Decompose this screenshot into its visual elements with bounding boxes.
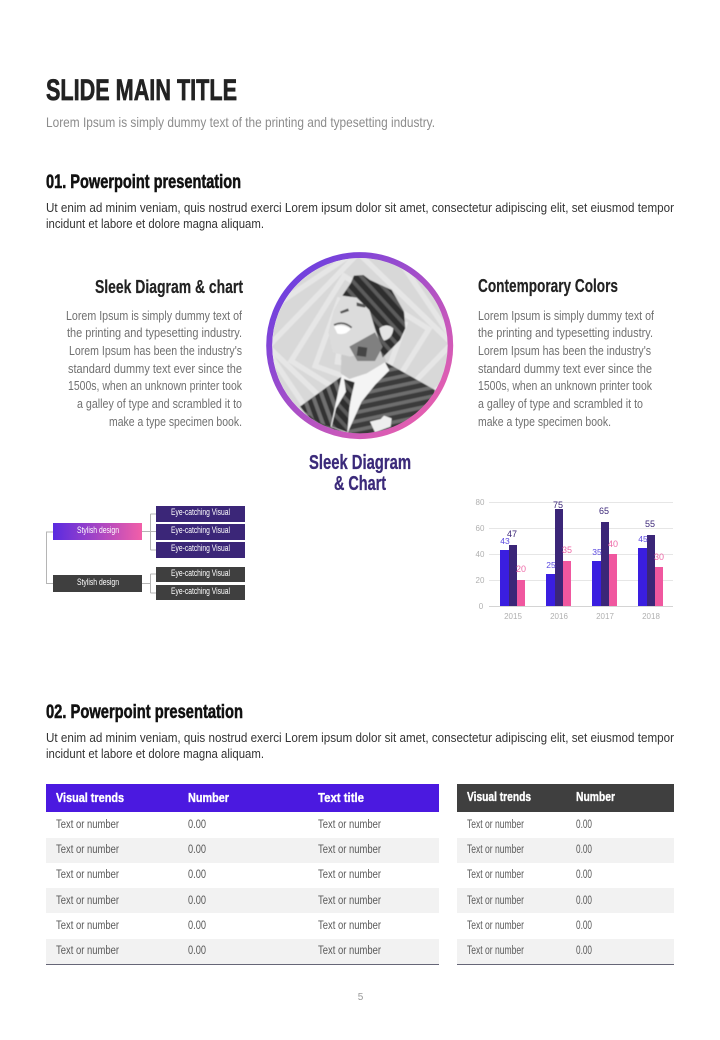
face [328,296,381,357]
tree diagram [46,506,245,600]
bar chart: 2016 [550,612,568,621]
portrait photo in gradient ring [266,252,454,440]
left table: Text title [318,790,364,805]
left table: Text or number [56,844,119,856]
right text block [478,309,654,429]
bar chart: 65 [599,506,609,516]
bar chart: 45 [638,534,648,544]
node: dark root [53,575,142,592]
left table: Text or number [318,844,381,856]
left table: Text or number [56,895,119,907]
right table: 0.00 [576,945,592,957]
left text block [66,309,243,429]
right table: 0.00 [576,869,592,881]
bar chart: 2015 [504,612,522,621]
bar chart: 2018 [642,612,660,621]
portrait caption: Sleek Diagram [309,452,411,474]
right table: Text or number [467,844,524,856]
bar chart: 43 [500,536,510,546]
right text block: a galley of type and scrambled it to [478,397,643,411]
left table: Text or number [56,945,119,957]
right table: 0.00 [576,844,592,856]
bar chart: 55 [645,519,655,529]
title: SLIDE MAIN TITLE [46,74,237,107]
bar chart: 35 [592,547,602,557]
right text block: Lorem Ipsum has been the industry's [478,344,651,358]
right table: 0.00 [576,819,592,831]
section 1 intro text [46,200,675,231]
right table: Visual trends [467,789,531,804]
left table: Text or number [318,869,381,881]
left text block: make a type specimen book. [109,415,242,429]
subtitle: Lorem Ipsum is simply dummy text of the printing and typesetting industry. [46,114,435,130]
suit [300,362,435,442]
bar chart: 40 [476,550,485,559]
left table: 0.00 [188,819,206,831]
right text block: 1500s, when an unknown printer took [478,379,653,393]
right table: Text or number [467,819,524,831]
bar chart: 40 [608,539,618,549]
right table: Text or number [467,869,524,881]
right text block: Lorem Ipsum is simply dummy text of [478,309,654,323]
left table: Number [188,790,229,805]
right table: 0.00 [576,895,592,907]
page number: 5 [358,992,364,1003]
bar chart: 30 [654,552,664,562]
left text block: standard dummy text ever since the [68,362,242,376]
right text block: the printing and typesetting industry. [478,326,653,340]
node: dark visual 1 [156,567,245,582]
left table: 0.00 [188,920,206,932]
hair [342,275,405,358]
right table: Text or number [467,920,524,932]
bar chart: 20 [476,576,485,585]
right table: Text or number [467,895,524,907]
section 2 intro text [46,730,675,761]
left text block: the printing and typesetting industry. [67,326,242,340]
left text block: 1500s, when an unknown printer took [68,379,243,393]
node: purple visual 1: Eye-catching Visual [171,507,230,517]
node: gradient root [53,523,142,540]
left table: Text or number [318,895,381,907]
left table: Text or number [56,869,119,881]
bar chart: 60 [476,524,485,533]
right heading: Contemporary Colors [478,276,618,296]
bar chart [476,498,673,621]
node: purple visual 3 [156,542,245,558]
section 2 intro text: incidunt et labore et dolore magna aliquam. [46,746,264,761]
neck [340,351,386,380]
left table: Text or number [318,920,381,932]
bar chart: 47 [507,529,517,539]
tie [332,379,355,432]
node: gradient root: Stylish design [77,525,119,535]
left table: 0.00 [188,844,206,856]
left text block: Lorem Ipsum is simply dummy text of [66,309,242,323]
right text block: make a type specimen book. [478,415,611,429]
left table: 0.00 [188,869,206,881]
section 2 heading: 02. Powerpoint presentation [46,702,243,723]
node: dark visual 2 [156,585,245,600]
left table: 0.00 [188,945,206,957]
portrait caption [309,452,411,495]
left table: 0.00 [188,895,206,907]
node: purple visual 3: Eye-catching Visual [171,543,230,553]
right table: Text or number [467,945,524,957]
pocket square [370,416,392,432]
left text block: a galley of type and scrambled it to [77,397,242,411]
left text block: Lorem Ipsum has been the industry's [69,344,242,358]
node: purple visual 2: Eye-catching Visual [171,525,230,535]
left heading: Sleek Diagram & chart [95,277,243,297]
right text block: standard dummy text ever since the [478,362,652,376]
node: dark root: Stylish design [77,577,119,587]
bar chart: 0 [479,602,484,611]
left table: Text or number [56,819,119,831]
node: purple visual 2 [156,524,245,540]
left table [46,784,439,965]
node: dark visual 1: Eye-catching Visual [171,568,230,578]
left table: Text or number [318,819,381,831]
right table: 0.00 [576,920,592,932]
left table: Text or number [318,945,381,957]
node: dark visual 2: Eye-catching Visual [171,586,230,596]
bar chart: 35 [562,545,572,555]
portrait caption: & Chart [334,473,386,495]
right table [457,784,674,965]
right table: Number [576,789,615,804]
bar chart: 80 [476,498,485,507]
node: purple visual 1 [156,506,245,522]
bar chart: 75 [553,500,563,510]
bar chart: 25 [546,560,556,570]
shirt [331,360,389,433]
left table: Visual trends [56,790,124,805]
section 1 intro text: incidunt et labore et dolore magna aliquam. [46,216,264,231]
left table: Text or number [56,920,119,932]
section 1 heading: 01. Powerpoint presentation [46,172,241,193]
bar chart: 2017 [596,612,614,621]
bar chart: 20 [516,564,526,574]
